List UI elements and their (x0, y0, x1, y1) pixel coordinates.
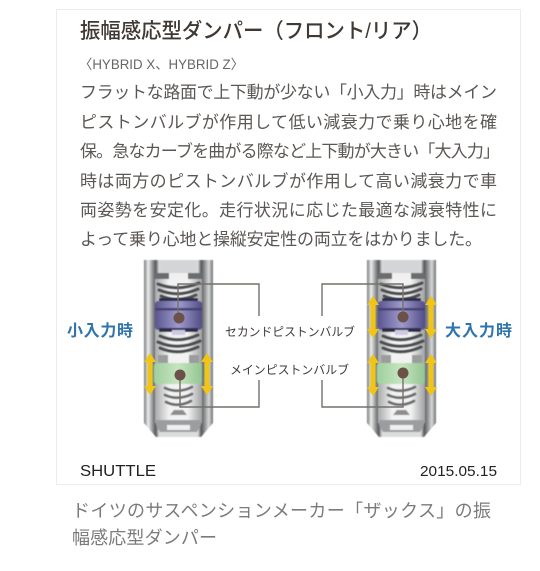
arrows: main valve right (425, 354, 437, 396)
label: small input: 小入力時 (67, 322, 133, 340)
date: 2015.05.15 (420, 463, 497, 480)
arrows: main valve left (367, 354, 379, 396)
label: large input: 大入力時 (445, 322, 512, 340)
caption (72, 501, 491, 548)
body text: よって乗り心地と操縦安定性の両立をはかりました。 (80, 230, 482, 249)
arrows: second valve left (367, 296, 379, 338)
damper diagram: small input (144, 260, 213, 437)
caption: 幅感応型ダンパー (72, 528, 217, 548)
leader lines (178, 284, 403, 407)
body text (80, 83, 500, 249)
body text: 両姿勢を安定化。走行状況に応じた最適な減衰特性に (80, 201, 497, 220)
caption: ドイツのサスペンションメーカー「ザックス」の振 (72, 501, 491, 521)
damper diagram: large input (367, 260, 437, 437)
label: main piston valve: メインピストンバルブ (230, 362, 349, 377)
body text: ピストンバルブが作用して低い減衰力で乗り心地を確 (80, 112, 497, 132)
subtitle: 〈HYBRID X、HYBRID Z〉 (79, 57, 244, 72)
label: second piston valve: セカンドピストンバルブ (225, 324, 355, 339)
body text: 時は両方のピストンバルブが作用して高い減衰力で車 (80, 171, 497, 191)
title: 振幅感応型ダンパー（フロント/リア） (80, 19, 432, 43)
arrow: main valve left (144, 353, 156, 395)
body text: フラットな路面で上下動が少ない「小入力」時はメイン (80, 83, 497, 102)
card panel (56, 10, 520, 484)
credit: SHUTTLE: SHUTTLE (80, 463, 156, 480)
body text: 保。急なカーブを曲がる際など上下動が大きい「大入力」 (80, 141, 500, 161)
arrow: main valve right (201, 353, 213, 395)
arrows: second valve right (425, 296, 437, 338)
valve markers (174, 312, 408, 380)
